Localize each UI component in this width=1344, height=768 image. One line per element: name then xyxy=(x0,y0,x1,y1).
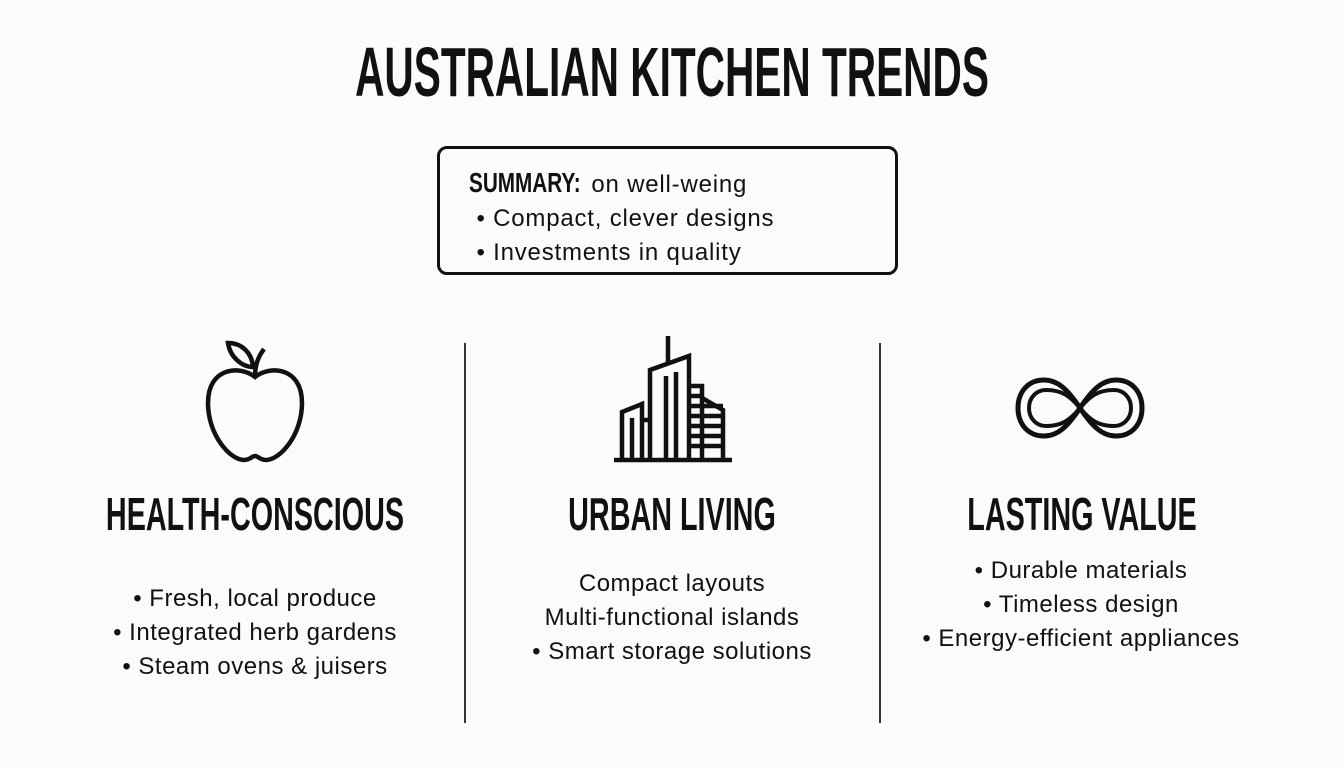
list: urban: • Smart storage solutions xyxy=(532,638,812,665)
summary box: on well-weing xyxy=(591,171,747,198)
icon: infinity xyxy=(1016,378,1144,438)
list: urban xyxy=(532,570,812,665)
list: health: • Steam ovens & juisers xyxy=(122,653,388,680)
list: health: • Fresh, local produce xyxy=(133,585,377,612)
icon: apple xyxy=(206,340,304,462)
icon: buildings xyxy=(614,336,732,462)
list: lasting xyxy=(922,557,1240,652)
title: AUSTRALIAN KITCHEN TRENDS xyxy=(355,33,989,111)
summary box: • Investments in quality xyxy=(476,239,742,266)
list: urban: Multi-functional islands xyxy=(545,604,799,631)
heading: urban living: URBAN LIVING xyxy=(568,488,776,540)
heading: lasting value: LASTING VALUE xyxy=(967,488,1197,540)
summary box: • Compact, clever designs xyxy=(476,205,774,232)
summary box: SUMMARY: xyxy=(469,167,581,198)
heading: health-conscious: HEALTH-CONSCIOUS xyxy=(106,488,404,540)
list: lasting: • Energy-efficient appliances xyxy=(922,625,1240,652)
list: lasting: • Timeless design xyxy=(983,591,1179,618)
summary box xyxy=(437,146,898,275)
list: health xyxy=(113,585,397,680)
list: lasting: • Durable materials xyxy=(975,557,1187,584)
divider xyxy=(464,343,466,723)
list: urban: Compact layouts xyxy=(579,570,765,597)
list: health: • Integrated herb gardens xyxy=(113,619,397,646)
